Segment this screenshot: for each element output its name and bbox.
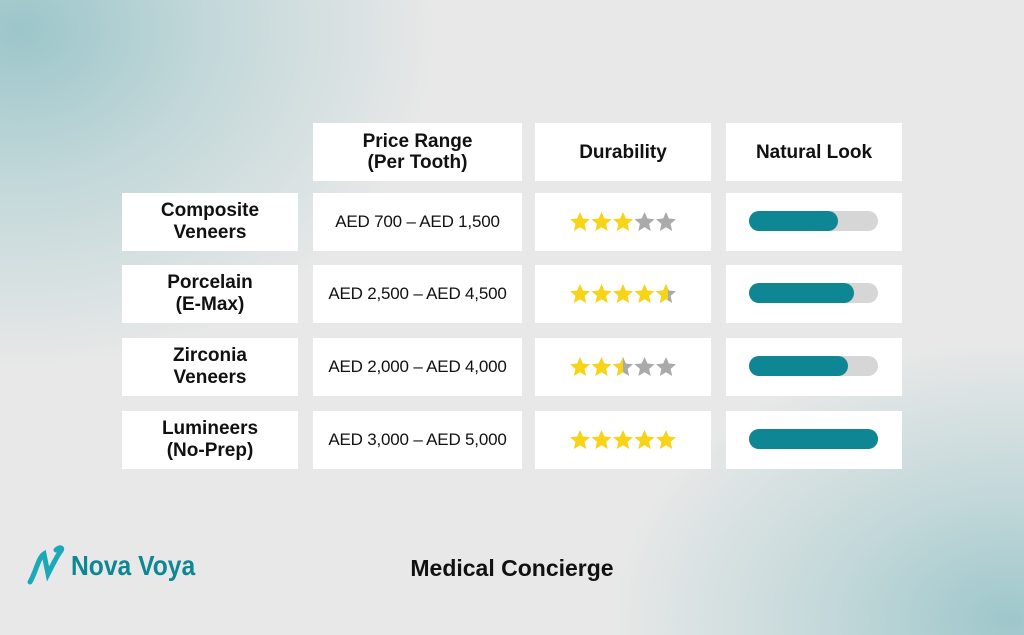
row 2 label: (E-Max) bbox=[176, 294, 244, 315]
row 4 label: Lumineers bbox=[162, 418, 258, 439]
row 2 label bbox=[122, 265, 298, 323]
header: price range: (Per Tooth) bbox=[368, 152, 467, 173]
row 1 label bbox=[122, 193, 298, 251]
row 1 bar bbox=[726, 193, 902, 251]
row 3 price: AED 2,000 – AED 4,000 bbox=[328, 357, 507, 376]
row 1 label: Veneers bbox=[174, 222, 246, 243]
row 2 bar bbox=[726, 265, 902, 323]
footer text: Medical Concierge bbox=[410, 555, 614, 581]
logo text: Nova Voya bbox=[71, 550, 195, 581]
row 3 stars bbox=[535, 338, 711, 396]
header: durability bbox=[535, 123, 711, 181]
row 3 label: Zirconia bbox=[173, 345, 247, 366]
row 4 price bbox=[313, 411, 522, 469]
row 2 price: AED 2,500 – AED 4,500 bbox=[328, 284, 507, 303]
row 3 label: Veneers bbox=[174, 367, 246, 388]
row 1 stars bbox=[535, 193, 711, 251]
header: durability: Durability bbox=[579, 142, 667, 162]
icon: logo swoosh bbox=[28, 545, 64, 584]
row 4 label bbox=[122, 411, 298, 469]
row 3 bar bbox=[726, 338, 902, 396]
logo bbox=[28, 545, 196, 584]
row 1 label: Composite bbox=[161, 200, 259, 221]
row 4 price: AED 3,000 – AED 5,000 bbox=[328, 430, 507, 449]
header: natural look bbox=[726, 123, 902, 181]
row 4 stars bbox=[535, 411, 711, 469]
header: price range: Price Range bbox=[363, 131, 472, 152]
row 3 label bbox=[122, 338, 298, 396]
row 4 label: (No-Prep) bbox=[167, 440, 253, 461]
row 1 price: AED 700 – AED 1,500 bbox=[335, 212, 500, 231]
row 3 price bbox=[313, 338, 522, 396]
header: natural look: Natural Look bbox=[756, 142, 872, 162]
row 4 bar bbox=[726, 411, 902, 469]
header: price range bbox=[313, 123, 522, 181]
row 2 label: Porcelain bbox=[167, 272, 253, 293]
row 1 price bbox=[313, 193, 522, 251]
row 2 stars bbox=[535, 265, 711, 323]
row 2 price bbox=[313, 265, 522, 323]
